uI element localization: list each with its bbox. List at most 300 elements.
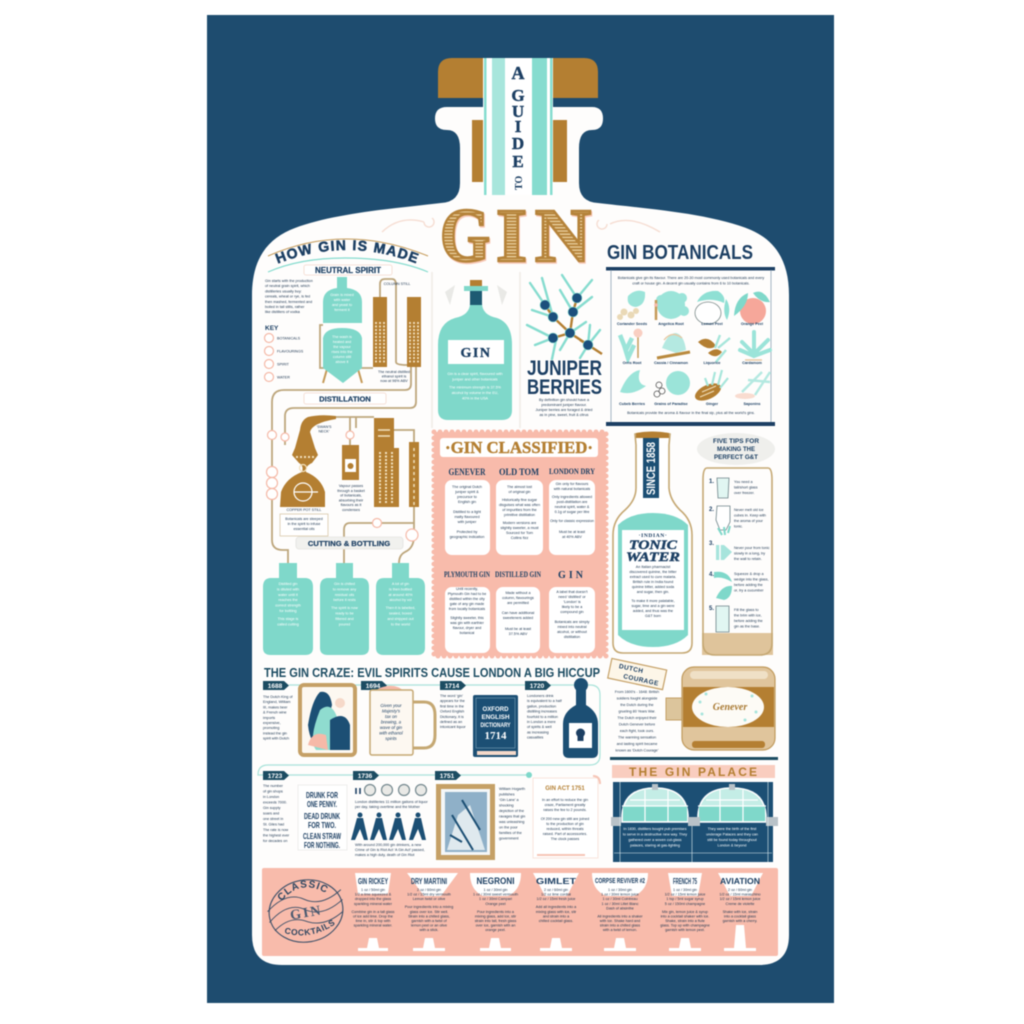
gin type: genever: geographic indication (450, 535, 484, 539)
icon: orange peel (734, 292, 770, 324)
text: 1723: exceeds 7000. (263, 800, 287, 804)
heading: juniper berries: JUNIPER (527, 357, 602, 380)
date tag: 1751: 1751 (440, 773, 455, 780)
heading: GIN: I (497, 196, 528, 280)
title ribbon: A guide to: I (515, 117, 522, 136)
icon: grains of paradise (654, 371, 690, 397)
botanicals intro: Botanicals give gin its flavour. There are 20-30 most commonly used botanicals and every (618, 276, 764, 280)
juniper text: Juniper berries are foraged & dried (536, 408, 592, 412)
tankard with text: spirits (385, 736, 398, 741)
gin type: distilled gin: Can have additional (502, 611, 534, 615)
ribbon: dutch courage: COURAGE (623, 673, 660, 688)
gin type: london dry (549, 467, 595, 555)
tank: fermenter: above it (336, 360, 348, 364)
botanicals intro: craft or house gin. A decent gin usually contains from 6 to 10 botanicals. (632, 282, 750, 286)
cocktail: corpse reviver #2 (592, 873, 648, 951)
tonic label: British rule in India found (633, 580, 673, 584)
cocktail: dry martini: Strain into a chilled glass, (408, 914, 450, 918)
gin type: old tom: of impurities from the (502, 508, 537, 512)
panel: dutch courage (608, 658, 775, 752)
panel: indian tonic water bottle (613, 432, 692, 653)
botanical labels: row two: Cassia / Cinnamon (654, 361, 689, 365)
botanical basket: condenses (342, 508, 360, 512)
cocktail: dry martini: garnish with a twist of (411, 919, 448, 923)
cocktail: french 75: garnish with lemon peel. (665, 928, 705, 932)
bottle cap and neck (438, 58, 598, 182)
cocktail: corpse reviver #2: with a twist of lemon. (603, 928, 637, 932)
bottle: filtering: residual oils (335, 593, 354, 597)
tip 5 (709, 606, 763, 632)
key (264, 325, 304, 382)
palace text left: palaces, staring at gas-lighting (630, 844, 680, 848)
highball glass outline (702, 468, 773, 655)
panel: gin act 1751: raised. Part of accessories. (543, 832, 587, 836)
tip 4: wedge into the glass, (734, 578, 769, 582)
heading: GIN: N (536, 196, 592, 280)
bottle: filtering: poured (339, 622, 350, 626)
figures text: Crime of Gin is Riot Act ‘A Gin Act’ passed, (355, 848, 425, 852)
cocktail: corpse reviver #2: 1 oz / 30ml Lillet Blanc (602, 902, 639, 906)
pipes: neutral spirit stage (272, 279, 416, 563)
icon: ginger (692, 370, 728, 404)
cocktail: dry martini: with a stick. (419, 928, 439, 932)
skull tally: London distilleries 11 million gallons of liquor (355, 800, 428, 804)
logo: classic gin cocktails: GIN (289, 903, 324, 924)
tankard with text: tax on (385, 714, 398, 719)
botanical basket: through a basket (337, 489, 365, 493)
building facade (613, 782, 773, 862)
intro text: distilleries usually buy: (265, 289, 302, 293)
text: 1714: intoxicant liquor (440, 725, 466, 729)
tip 5: the brim with ice, (734, 614, 762, 618)
palace text left: gathered over a woven cut-glass (628, 838, 682, 842)
cocktail: aviation: garnish with a cherry. (723, 919, 757, 923)
cocktail: dry martini (405, 873, 458, 951)
gin type: london dry: with natural botanicals (554, 487, 590, 491)
figures text: makes a high duty, death of Gin Riot (355, 853, 414, 857)
cocktail: french 75: 1 oz / 30ml gin (673, 888, 697, 892)
heading: juniper berries (527, 357, 602, 399)
text: 1720: distilling increases (527, 710, 557, 714)
tank: fermenter: heated and (333, 340, 351, 344)
botanical basket: absorbing their (339, 498, 364, 502)
gin type: old tom: slightly sweeter, a must (500, 526, 539, 530)
cocktail: aviation: AVIATION (720, 876, 760, 886)
skull tally: per day, taking overtime and the Mother (355, 805, 421, 809)
gin description: Gin is a clear spirit, flavoured with (447, 372, 503, 376)
gin type: distilled gin: Made without a (505, 591, 531, 595)
genever flask: Genever (713, 702, 747, 713)
gin type: old tom: Collins fizz (511, 536, 528, 540)
gin type: old tom: OLD TOM (499, 467, 539, 477)
botanical labels: row three: Grains of Paradise (654, 402, 688, 406)
botanical basket: flavours as it (341, 503, 361, 507)
label: cutting and bottling (296, 537, 403, 549)
timeline line (258, 685, 600, 775)
tank: mash tun: ferment it (334, 308, 350, 312)
date tag: 1688 (263, 681, 289, 690)
icon: cubeb berries (620, 370, 646, 393)
column stills: now at 96% ABV (380, 379, 408, 383)
gin type: old tom: primitive distillation (504, 513, 535, 517)
broadsheet: drunk for a penny: DRUNK FOR (306, 790, 338, 800)
text: dutch courage: The warming sensation (618, 736, 656, 740)
cocktail: negroni: 1 oz / 30ml gin (484, 888, 507, 892)
heading: how gin is made: HOW GIN IS MADE (274, 239, 420, 264)
date tag: 1694 (361, 681, 387, 690)
tonic label (618, 513, 688, 647)
tip 2: cubes in. Keep with (734, 514, 766, 518)
tonic label: discovered quinine, the bitter (629, 570, 677, 574)
gin type: plymouth gin (444, 570, 490, 653)
arch window left (622, 788, 688, 822)
bottle: cutting: water until it (278, 593, 298, 597)
pot still caption: COPPER POT STILL (287, 508, 321, 512)
panel: gin classified (434, 432, 606, 656)
cocktail: dry martini: lemon peel or an olive (411, 924, 447, 928)
palace text left: to serve in a destructive new way. They (623, 832, 687, 836)
panel: the gin craze (258, 665, 600, 860)
bottle: cutting: called cutting (277, 622, 299, 626)
tankard with text: with ethanol (379, 730, 404, 736)
gin type: plymouth gin: PLYMOUTH GIN (444, 570, 490, 579)
heading: GIN: N (535, 194, 591, 278)
botanical labels: row one: Orange Peel (741, 322, 763, 326)
palace text right: They were the birth of the first (708, 827, 756, 831)
cocktail: aviation: Shake with ice, strain (723, 910, 757, 914)
title ribbon: A guide to: U (512, 102, 524, 121)
cocktail: gimlet: 1/2 oz / 15ml fresh juice (537, 897, 575, 901)
text: 1688: expensive, (263, 721, 281, 725)
text: 1720: is equivalent to a half (527, 699, 563, 703)
gin type: london dry: Only for classic expression (550, 519, 594, 523)
gin type: plymouth gin: botanical (460, 631, 475, 635)
text: 1723: Gin supply (263, 806, 281, 810)
gin type: genever: precursor to (457, 495, 477, 499)
tank: fermenter (323, 328, 362, 383)
text: dutch courage: known as ‘Dutch Courage’ (615, 748, 659, 752)
text: 1688: The Dutch King of (263, 695, 293, 699)
cocktail: gin rickey: dropped into the glass (355, 897, 391, 901)
text: gin lane: families of the (499, 831, 522, 835)
key: KEY (265, 325, 279, 332)
cocktail: french 75: 1/2 oz / 15ml lemon juice (665, 893, 705, 897)
panel: gin act 1751: raises the fee to 2 pounds. (543, 808, 587, 812)
gin type: genever: Distilled to a light (453, 510, 481, 514)
tips heading: PERFECT G&T (714, 454, 759, 461)
cocktail: corpse reviver #2: 1 oz / 30ml Cointreau (602, 897, 638, 901)
tea towel background (207, 15, 834, 1003)
figures text: With around 200,000 gin drinkers, a new (355, 843, 422, 847)
gin type: plymouth gin: Plymouth Gin had to be (448, 592, 486, 596)
tips heading: FIVE TIPS FOR (713, 438, 759, 445)
text: gin lane: on the poor (499, 826, 518, 830)
bottle label: gin (448, 340, 504, 364)
text: dutch courage: Dutch Genever before (619, 722, 655, 726)
gin bottle illustration (438, 303, 512, 420)
bottle: bottling: and shipped out (387, 617, 414, 621)
juniper text: predominant juniper flavour. (541, 403, 587, 407)
tip 2: Never melt old ice (734, 508, 764, 512)
gin type: old tom: Sourced for Tom (506, 531, 533, 535)
cocktail: negroni: 1 oz / 30ml sweet vermouth (473, 893, 518, 897)
cocktail: corpse reviver #2: 1 oz / 30ml gin (608, 888, 632, 892)
text: 1688: instead the gin (263, 731, 287, 735)
label: cutting and bottling: CUTTING & BOTTLING (308, 539, 390, 548)
juniper branch (527, 275, 602, 359)
text: 1720: of spirits & well (527, 725, 552, 729)
text: 1723: St. Giles had (263, 822, 284, 826)
bottle: bottling: sealed, boxed (389, 612, 412, 616)
cocktail: gimlet: 1/2 oz lime cordial (541, 893, 571, 897)
text: 1714: defined as an (440, 720, 462, 724)
column stills: COLUMN STILL (384, 282, 410, 286)
ribbon: dutch courage: DUTCH (618, 663, 644, 675)
tip 2 (709, 506, 766, 535)
botanical basket: Vapour passes (339, 484, 363, 488)
gin type: gin: mixed into neutral (557, 625, 587, 629)
gin type: gin: need ‘distilled’ or (558, 595, 586, 599)
icon: cassia and cinnamon (657, 333, 690, 358)
panel: how gin is made (262, 238, 429, 656)
cocktail: french 75: Shake, strain into a flute (665, 919, 705, 923)
tankard with text: wave of gin (380, 725, 403, 730)
ribbon: dutch courage (608, 658, 667, 690)
cocktail: aviation: Creme de violette (726, 902, 754, 906)
date tag: 1694: 1694 (366, 683, 381, 690)
botanical labels: row three: Saponins (743, 402, 761, 406)
text: 1723: one street in (263, 817, 283, 821)
text: gin lane: ‘Gin Lane’ a (499, 798, 519, 802)
tip 3: slowly in a long, try (734, 552, 765, 556)
tip 1: 1. (709, 479, 714, 485)
botanical labels: row two: Orris Root (623, 361, 642, 365)
panel: gin act 1751 (533, 776, 600, 858)
gin type: distilled gin: 37.5% ABV (509, 632, 528, 636)
gin type: gin (549, 570, 595, 653)
cocktail: gimlet: and strain into a (543, 914, 570, 918)
tonic label: ·INDIAN· (639, 533, 667, 539)
tip 2: the aroma of your (734, 519, 764, 523)
tip 1: You need a (734, 480, 753, 484)
cocktail: negroni: Orange peel (485, 902, 506, 906)
text: 1688: promoting (263, 726, 279, 730)
tip 2: tonic. (734, 524, 743, 528)
timeline end dot (526, 772, 532, 778)
cocktail: dry martini: Lemon twist or olive (413, 897, 445, 901)
cocktail: french 75 (660, 873, 710, 951)
tonic label: G&T born (645, 614, 661, 618)
gin type: gin: ‘London’ is (563, 600, 581, 604)
text: gin lane: ravages that gin (499, 814, 525, 818)
dictionary book: ENGLISH (482, 714, 510, 721)
cocktail: corpse reviver #2: All ingredients into a shaker (597, 914, 643, 918)
cocktail: french 75: Mix gin, lemon juice & syrup (662, 910, 708, 914)
tip 5: 5. (709, 606, 714, 612)
bottle: cutting (263, 563, 313, 655)
tonic label: To make it more palatable, (631, 599, 675, 603)
broadsheet: drunk for a penny: ONE PENNY. (307, 799, 337, 809)
date tag: 1720: 1720 (530, 683, 545, 690)
icon: orris root (620, 328, 642, 358)
date tag: 1720 (525, 681, 551, 690)
tip 3: Never pour from tonic (734, 546, 770, 550)
cocktail: aviation: 1/2 oz / 15ml lemon juice (720, 897, 760, 901)
cocktail: gin rickey: GIN RICKEY (358, 877, 388, 886)
cocktail: gimlet: chilled cocktail glass. (539, 919, 573, 923)
cocktail: negroni: 1 oz / 30ml Campari (479, 897, 512, 901)
tip 1 (709, 478, 758, 498)
tonic label: An Italian pharmacist (636, 565, 670, 569)
date tag: 1723 (263, 771, 289, 780)
text: 1720: fourfold to a million (527, 715, 558, 719)
dictionary book (473, 695, 518, 757)
botanical labels: row two: Cardamom (742, 361, 763, 365)
bottle: cutting: reaches the (278, 598, 298, 602)
intro text: like distillers of vodka (265, 310, 301, 314)
cocktail: french 75: 1 tsp / 5ml sugar syrup (666, 897, 704, 901)
cocktail: gimlet (533, 873, 579, 951)
date tag: 1736 (353, 771, 379, 780)
label: neutral spirit: NEUTRAL SPIRIT (315, 266, 381, 275)
gin description: juniper and other botanicals (451, 378, 498, 382)
tankard with text: brewing, a (381, 720, 402, 724)
cocktail: negroni (470, 873, 521, 951)
gin type: genever: GENEVER (448, 467, 486, 477)
poison bottle (563, 678, 598, 758)
cocktail: gin rickey (351, 873, 395, 951)
gin type: plymouth gin: distilled within the city (449, 597, 485, 601)
column stills (373, 282, 421, 383)
tank: fermenter: the vapour (333, 345, 351, 349)
cocktail: gin rickey: sparkling mineral water. (354, 924, 392, 928)
gin type: genever: The original Dutch (452, 485, 482, 489)
gin type: gin: alcohol, or without (557, 630, 587, 634)
gin type: genever (445, 467, 490, 555)
icon: angelica root (654, 291, 689, 320)
text: gin lane: William Hogarth (499, 787, 525, 791)
bottle: filtering: Gin is chilled (334, 582, 355, 586)
bottle: filtering: The spirit is now (331, 606, 358, 610)
cocktail: gimlet: mixing glass with ice, stir (536, 910, 577, 914)
cocktail: corpse reviver #2: 1 oz / 30ml lemon juice (601, 893, 639, 897)
gin type: old tom: The almost lost (507, 485, 532, 489)
text: dutch courage: grueling 80 Years War. (619, 710, 655, 714)
pot still caption: essential oils (293, 527, 315, 531)
cocktail: negroni: mixing glass, add ice, stir (475, 914, 517, 918)
panel: five tips (697, 433, 775, 655)
gin type: gin: compound gin (560, 610, 584, 614)
cocktail: negroni: NEGRONI (476, 876, 514, 887)
key: SPIRIT (277, 362, 290, 366)
gin type: distilled gin: are permitted (507, 601, 529, 605)
tonic label: TONIC (629, 538, 678, 552)
painting: king william (300, 685, 355, 755)
gin type: plymouth gin: Until recently, (456, 587, 478, 591)
cocktail: corpse reviver #2: strain into a chilled glass (600, 924, 640, 928)
cocktail: corpse reviver #2: Dash of absinthe (606, 906, 634, 910)
date tag: 1688: 1688 (268, 683, 283, 690)
gin type: old tom: Modern versions are (503, 521, 536, 525)
cocktail: gin rickey: lime in, stir & top with (356, 919, 390, 923)
text: 1688: imports (263, 716, 275, 720)
text: 1714: The word ‘gin’ (440, 694, 463, 698)
cocktail: gin rickey: Combine gin in a tall glass (351, 910, 395, 914)
intro text: cereals, wheat or rye, is fed (265, 295, 310, 299)
title ribbon: A guide to: G (511, 86, 525, 105)
gin type: gin: distillation (564, 635, 580, 639)
tips heading (697, 433, 775, 465)
cocktail: gimlet: GIMLET (536, 876, 577, 886)
cocktail: gin rickey: 1 oz / 50ml gin (361, 888, 385, 892)
gin type: distilled gin (495, 570, 541, 653)
tank: fermenter: column still (333, 355, 351, 359)
gin type: distilled gin: column, flavourings (502, 596, 534, 600)
tank: mash tun (323, 277, 362, 323)
column stills: ethanol spirit is (382, 374, 406, 378)
tank: mash tun: with water (334, 298, 351, 302)
heading: the gin craze: THE GIN CRAZE: EVIL SPIRITS CAUSE LONDON A BIG HICCUP (264, 665, 600, 680)
bottle: bottling: to the world (391, 622, 410, 626)
window divider lines (614, 782, 772, 862)
tonic label: WATER (626, 550, 680, 564)
cocktail: gin rickey: 1/2 a lime squeezed & (355, 893, 392, 897)
dictionary book: DICTIONARY (480, 722, 511, 729)
gin type: gin: A label that doesn’t (556, 590, 588, 594)
dictionary book: 1714 (484, 730, 507, 742)
text: 1723: in London (263, 795, 279, 799)
icon: cardamom (740, 332, 770, 360)
botanical labels: row three: Ginger (706, 402, 719, 406)
tank: mash tun: and yeast to (332, 303, 352, 307)
tip 4: before adding the (734, 583, 763, 587)
palace text right: still be found today throughout (707, 838, 757, 842)
tank: fermenter: The wash is (332, 335, 352, 339)
cocktail: french 75: 5 oz / 150ml champagne (665, 902, 705, 906)
cocktail: negroni: orange peel. (485, 928, 506, 932)
cocktail: french 75: FRENCH 75 (673, 877, 697, 886)
tip 3: 3. (709, 541, 714, 547)
gin type: distilled gin: Must be at least (505, 627, 531, 631)
gin type: london dry: neutral spirit, water & (555, 505, 590, 509)
heading: GIN: G (441, 196, 491, 280)
title ribbon: A guide to: A (512, 63, 524, 83)
panel: indian tonic water bottle: SINCE 1858 (646, 442, 658, 495)
tonic label: extract used to cure malaria. (630, 575, 676, 579)
gin type: plymouth gin: was gin with earthier (450, 621, 485, 625)
gin type: distilled gin: sweeteners added (503, 616, 533, 620)
genever flask (666, 667, 775, 750)
key: WATER (277, 376, 290, 380)
gin type: old tom: disguises what was often (499, 503, 540, 507)
text: 1720: gallon, production (527, 704, 556, 708)
logo: classic gin cocktails: CLASSIC (277, 880, 328, 900)
cocktail: gimlet: 2 oz / 60ml gin (544, 888, 568, 892)
botanical labels: row one: Angelica Root (658, 322, 684, 326)
gin type: gin: GIN (558, 570, 586, 581)
tip 4: 4. (709, 572, 714, 578)
botanical basket (337, 431, 365, 512)
icon: coriander seeds (617, 291, 645, 320)
icon: lemon peel (695, 291, 729, 324)
pot still caption: in the spirit to infuse (288, 522, 320, 526)
gin type: london dry: Must be at least (559, 530, 585, 534)
panel: juniper berries (527, 275, 602, 417)
bottle: cutting: for bottling (279, 609, 297, 613)
gin type: london dry: post-distillation are (557, 500, 587, 504)
text: 1723: for decades on (263, 839, 287, 843)
text: dutch courage: The Dutch enjoyed their (617, 716, 657, 720)
